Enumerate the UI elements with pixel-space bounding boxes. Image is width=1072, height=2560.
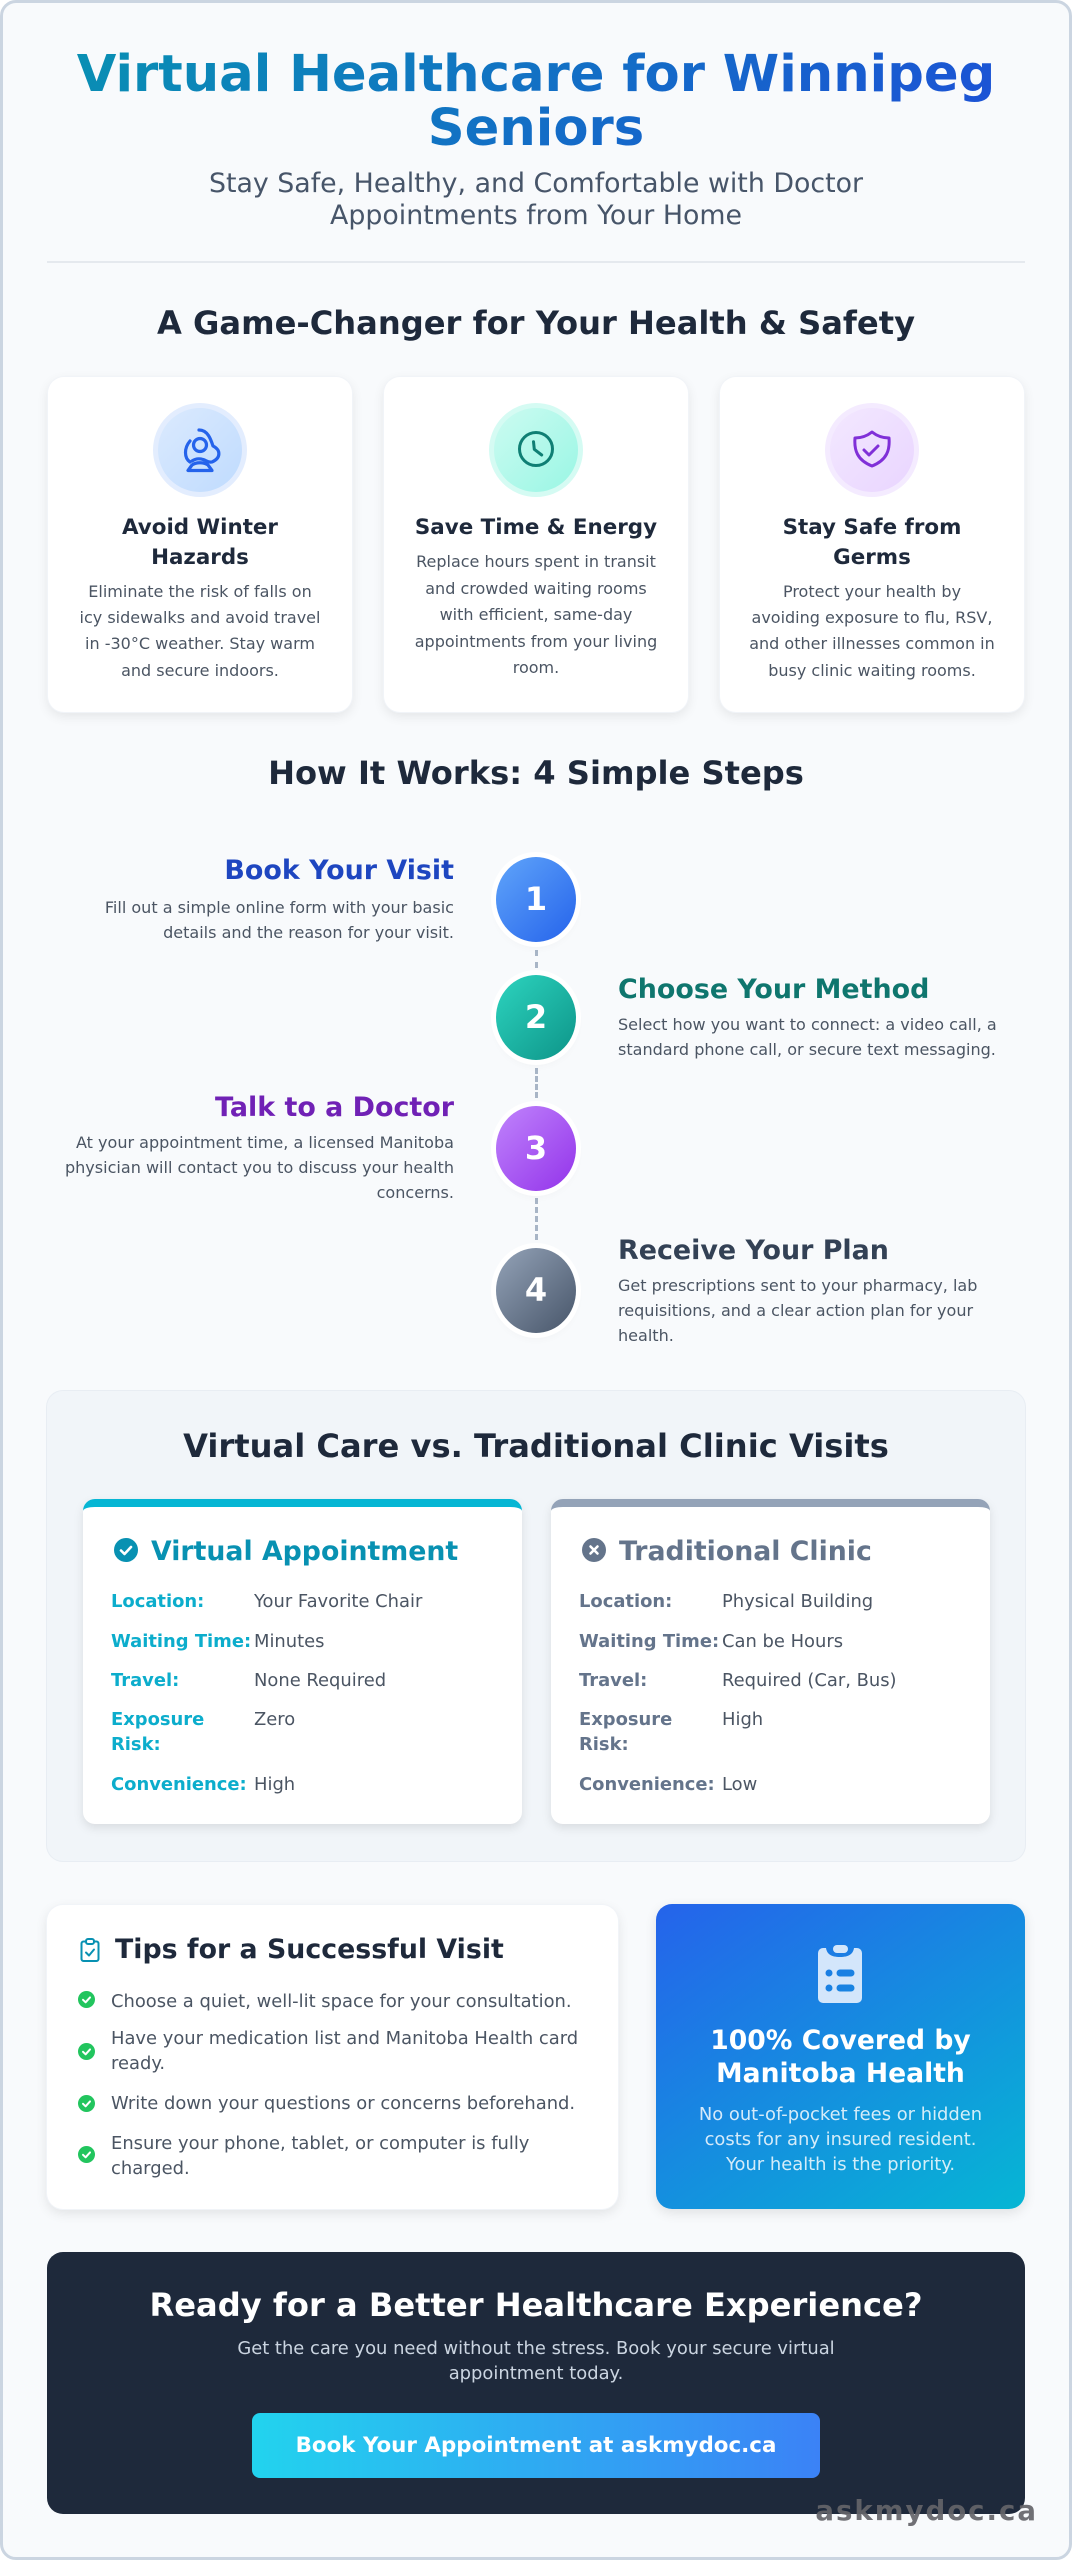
row: exposure risk: Zero (254, 1709, 295, 1730)
card heading: Germs (833, 545, 911, 570)
title: Seniors (428, 98, 644, 158)
tip 4: Ensure your phone, tablet, or computer is fully (111, 2133, 529, 2154)
cta text: Get the care you need without the stress. Book your secure virtual (237, 2338, 835, 2359)
card text (749, 582, 995, 680)
step 1 text: Fill out a simple online form with your basic (105, 898, 454, 916)
row: exposure risk (111, 1709, 295, 1755)
connector 2-3 (534, 1068, 538, 1098)
panel: comparison (47, 1391, 1025, 1861)
row: location (579, 1591, 873, 1612)
tip 4 (78, 2133, 529, 2179)
step 3 (65, 1092, 576, 1202)
card heading (122, 515, 278, 570)
step 2 number: 2 (525, 998, 547, 1036)
coverage text: No out-of-pocket fees or hidden (699, 2104, 982, 2125)
step 4 text (618, 1276, 977, 1345)
cta heading: Ready for a Better Healthcare Experience? (150, 2286, 922, 2324)
card text: appointments from your living (415, 632, 657, 651)
icon: clipboard list (818, 1945, 862, 2003)
cta button (252, 2413, 820, 2478)
step 2 title: Choose Your Method (618, 974, 929, 1005)
cta text (237, 2338, 835, 2384)
title (56, 48, 1016, 156)
row: exposure risk: Exposure (579, 1709, 672, 1730)
watermark: askmydoc.ca (815, 2494, 1038, 2527)
step 3 text: At your appointment time, a licensed Manitoba (76, 1133, 454, 1152)
card text: Protect your health by (783, 582, 961, 601)
step 2 number (496, 975, 576, 1060)
card heading (783, 515, 961, 570)
step 4 text: requisitions, and a clear action plan for your (618, 1301, 973, 1320)
card text: room. (513, 658, 559, 677)
row: location: Location: (111, 1591, 204, 1612)
tips heading: Tips for a Successful Visit (115, 1934, 504, 1964)
panel: traditional clinic (551, 1499, 990, 1824)
card text: Eliminate the risk of falls on (88, 582, 312, 601)
panel: tips (47, 1905, 618, 2209)
subtitle: Appointments from Your Home (330, 200, 742, 231)
card text: busy clinic waiting rooms. (768, 661, 976, 680)
card text: and other illnesses common in (749, 634, 995, 653)
card heading: Avoid Winter (122, 515, 278, 540)
panel: stay safe from germs (720, 377, 1024, 712)
step 3 number: 3 (525, 1128, 547, 1166)
coverage text: costs for any insured resident. (705, 2129, 976, 2150)
card text (415, 552, 657, 677)
coverage heading (710, 2025, 971, 2089)
icon: clipboard check (80, 1938, 100, 1962)
cta button: Book Your Appointment at askmydoc.ca (296, 2433, 776, 2458)
card text (80, 582, 320, 680)
row: waiting time (579, 1631, 843, 1652)
cta text: appointment today. (449, 2363, 623, 2384)
subtitle: Stay Safe, Healthy, and Comfortable with Doctor (209, 168, 863, 199)
icon: check circle (114, 1538, 138, 1562)
row: travel: Travel: (579, 1670, 647, 1691)
step 2 text (618, 1015, 997, 1059)
card text: Replace hours spent in transit (416, 552, 656, 571)
tip 1: Choose a quiet, well-lit space for your consultation. (111, 1991, 572, 2012)
step 4 (496, 1235, 977, 1345)
row: waiting time (111, 1631, 324, 1652)
row: convenience: Low (722, 1774, 757, 1795)
row: convenience: Convenience: (579, 1774, 715, 1795)
panel: avoid winter hazards (48, 377, 352, 712)
step 3 text: physician will contact you to discuss your health (65, 1158, 454, 1177)
card heading: Hazards (151, 545, 249, 570)
traditional heading: Traditional Clinic (619, 1536, 872, 1567)
row: location: Your Favorite Chair (254, 1591, 422, 1612)
card text: avoiding exposure to flu, RSV, (752, 608, 992, 627)
row: travel: Required (Car, Bus) (722, 1670, 897, 1691)
virtual heading: Virtual Appointment (151, 1536, 458, 1567)
coverage heading: Manitoba Health (716, 2058, 965, 2089)
row: location: Physical Building (722, 1591, 873, 1612)
step 1 title: Book Your Visit (224, 855, 454, 886)
row: waiting time: Waiting Time: (111, 1631, 251, 1652)
step 4 number: 4 (525, 1271, 547, 1309)
row: convenience: Convenience: (111, 1774, 247, 1795)
card text: and secure indoors. (121, 661, 279, 680)
tip 4: charged. (111, 2158, 190, 2179)
row: convenience: High (254, 1774, 295, 1795)
row: waiting time: Can be Hours (722, 1631, 843, 1652)
subtitle (209, 168, 863, 231)
tip 2: ready. (111, 2053, 165, 2074)
icon: x circle (582, 1538, 606, 1562)
card text: with efficient, same-day (440, 605, 632, 624)
row: travel (111, 1670, 386, 1691)
row: waiting time: Minutes (254, 1631, 324, 1652)
tip 3: Write down your questions or concerns beforehand. (111, 2093, 575, 2114)
icon: shield check (825, 403, 919, 497)
tip 2 (78, 2028, 578, 2074)
step 4 text: Get prescriptions sent to your pharmacy, lab (618, 1276, 977, 1295)
row: travel: None Required (254, 1670, 386, 1691)
heading: game-changer: A Game-Changer for Your Health & Safety (157, 304, 915, 342)
connector 3-4 (534, 1198, 538, 1240)
step 2 (496, 974, 997, 1060)
step 4 title: Receive Your Plan (618, 1235, 889, 1266)
step 3 title: Talk to a Doctor (215, 1092, 454, 1122)
step 3 text (65, 1133, 454, 1202)
card text: and crowded waiting rooms (425, 579, 647, 598)
row: exposure risk: Risk: (579, 1734, 629, 1755)
step 2 text: standard phone call, or secure text messaging. (618, 1040, 996, 1059)
step 1 number: 1 (525, 880, 547, 918)
row: travel (579, 1670, 897, 1691)
comparison heading: Virtual Care vs. Traditional Clinic Visits (183, 1427, 889, 1465)
coverage heading: 100% Covered by (710, 2025, 971, 2056)
tip 2: Have your medication list and Manitoba Health card (111, 2028, 578, 2049)
icon: clock (489, 403, 583, 497)
row: exposure risk: Exposure (111, 1709, 204, 1730)
card text: icy sidewalks and avoid travel (80, 608, 320, 627)
step 3 text: concerns. (377, 1183, 454, 1202)
coverage text (699, 2104, 982, 2175)
panel: coverage (656, 1904, 1025, 2209)
panel: call to action (47, 2252, 1025, 2514)
step 1 text (105, 898, 454, 942)
step 1 number (496, 857, 576, 942)
row: exposure risk: Risk: (111, 1734, 161, 1755)
panel: save time and energy (384, 377, 688, 712)
step 1 (105, 855, 576, 942)
title: Virtual Healthcare for Winnipeg (77, 44, 995, 104)
card heading: Stay Safe from (783, 515, 961, 540)
step 4 text: health. (618, 1326, 674, 1345)
panel: virtual appointment (83, 1499, 522, 1824)
coverage text: Your health is the priority. (726, 2154, 955, 2175)
step 4 number (496, 1248, 576, 1333)
row: exposure risk (579, 1709, 763, 1755)
card text: in -30°C weather. Stay warm (85, 634, 315, 653)
row: waiting time: Waiting Time: (579, 1631, 719, 1652)
row: exposure risk: High (722, 1709, 763, 1730)
row: location (111, 1591, 422, 1612)
heading: how it works: How It Works: 4 Simple Steps (268, 754, 804, 792)
row: travel: Travel: (111, 1670, 179, 1691)
icon: winter hazard (153, 403, 247, 497)
step 2 text: Select how you want to connect: a video call, a (618, 1015, 997, 1034)
card heading: Save Time & Energy (415, 515, 657, 540)
row: location: Location: (579, 1591, 672, 1612)
connector 1-2 (534, 950, 538, 968)
step 1 text: details and the reason for your visit. (163, 922, 454, 942)
step 3 number (496, 1106, 576, 1190)
